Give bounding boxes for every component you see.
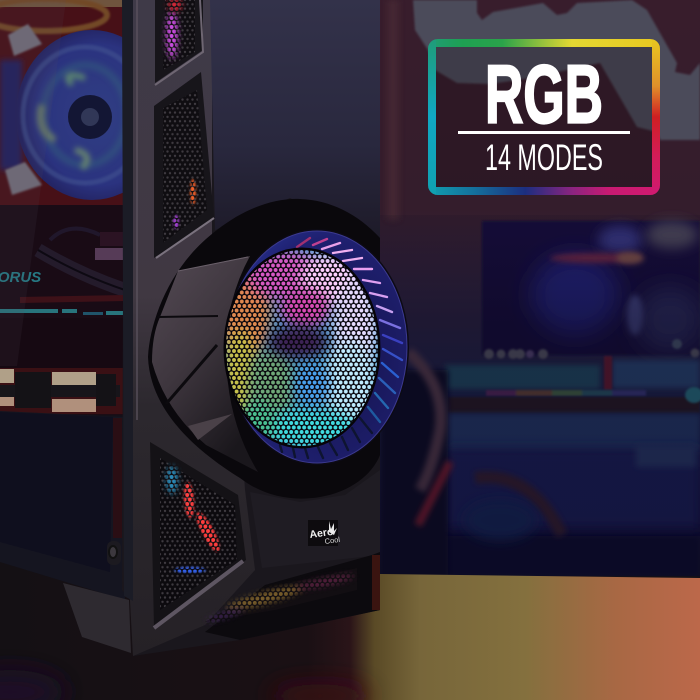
table surface bbox=[0, 560, 700, 700]
rainbow frame bbox=[428, 39, 660, 195]
hood barrel facets bbox=[152, 256, 258, 472]
AeroCool logo: Cool bbox=[324, 535, 341, 546]
outer LED ring bbox=[226, 230, 408, 464]
fan mesh face bbox=[219, 245, 385, 450]
AeroCool logo: Aero bbox=[309, 526, 334, 541]
cables and motherboard area bbox=[20, 229, 125, 300]
14 modes subheading: 14 MODES bbox=[485, 137, 603, 178]
teal light strip bbox=[0, 309, 125, 315]
expansion trays bbox=[0, 368, 125, 414]
keyboard rainbow bbox=[486, 390, 646, 396]
top mesh vent bbox=[155, 0, 203, 85]
second mesh vent bbox=[154, 72, 214, 258]
RGB badge bbox=[428, 39, 660, 195]
case foot bbox=[63, 583, 131, 653]
fan mount brackets bbox=[5, 24, 42, 195]
lower front block bbox=[250, 470, 380, 568]
desk with lights bbox=[444, 355, 700, 530]
RGB heading: RGB bbox=[485, 48, 603, 140]
top water block ring bbox=[0, 0, 125, 31]
wall monitor bbox=[482, 221, 700, 359]
glass side panel with internals bbox=[0, 0, 123, 414]
side panel lower box bbox=[0, 411, 125, 600]
blurred room background bbox=[380, 0, 700, 580]
blue cooling fan bbox=[0, 30, 123, 200]
bottom mesh vent bbox=[205, 552, 380, 640]
ring slots bbox=[280, 238, 402, 458]
fan hood bbox=[148, 199, 408, 499]
side thumbscrew bbox=[107, 541, 121, 565]
lower mesh vent bbox=[150, 442, 246, 628]
AeroCool logo bbox=[308, 520, 341, 546]
gaming chair bbox=[380, 352, 562, 580]
tower front panel bbox=[122, 0, 380, 656]
